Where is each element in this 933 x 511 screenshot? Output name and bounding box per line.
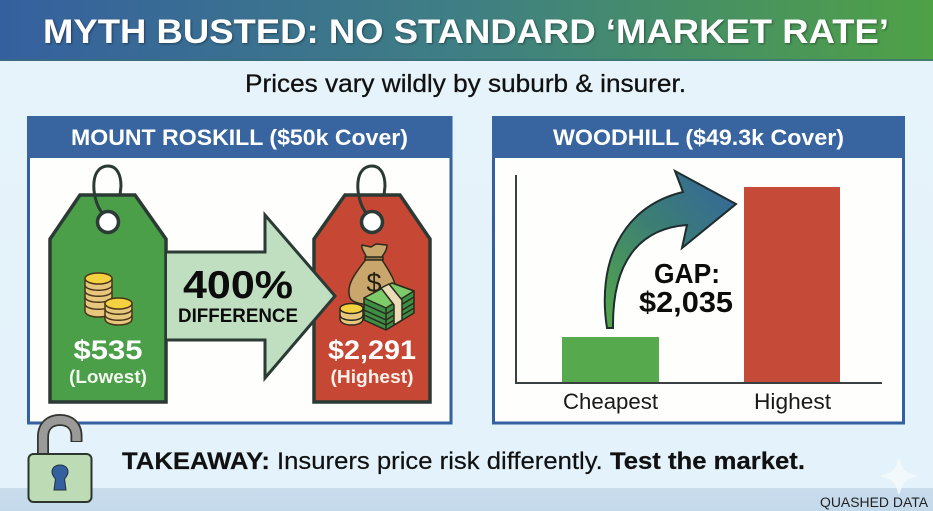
footer band	[0, 488, 933, 511]
callout: gap amount: GAP:	[654, 258, 720, 289]
price tag: highest: $2,291	[328, 335, 416, 365]
icon: money bag and cash	[340, 244, 414, 330]
icon: money bag and cash: $	[366, 268, 382, 298]
bar: highest	[744, 187, 840, 383]
callout: gap amount	[639, 258, 733, 319]
panel: Mount Roskill	[27, 116, 452, 423]
price tag: lowest: $535	[74, 335, 142, 365]
icon: open padlock	[28, 420, 92, 502]
callout: gap amount: $2,035	[639, 287, 733, 319]
panel heading: Mount Roskill: MOUNT ROSKILL ($50k Cover)	[71, 125, 408, 150]
arrow: curved gap arrow	[605, 171, 736, 328]
arrow: 400% difference: 400%	[183, 264, 293, 307]
label: highest: Highest	[754, 389, 831, 414]
panel heading: Mount Roskill	[27, 116, 452, 158]
price tag: highest: (Highest)	[330, 366, 414, 387]
price tag: lowest	[50, 166, 166, 402]
arrow: 400% difference: DIFFERENCE	[178, 305, 298, 327]
bar: cheapest	[562, 337, 659, 383]
panel: Woodhill	[492, 116, 905, 423]
panel heading: Woodhill: WOODHILL ($49.3k Cover)	[553, 125, 844, 150]
title banner	[0, 0, 933, 61]
arrow: 400% difference	[167, 215, 335, 378]
title banner: MYTH BUSTED: NO STANDARD ‘MARKET RATE’	[43, 13, 889, 51]
source credit: QUASHED DATA	[820, 495, 928, 510]
panel heading: Woodhill	[492, 116, 905, 158]
label: cheapest: Cheapest	[563, 389, 658, 414]
takeaway: TAKEAWAY: Insurers price risk differently. Test the market.	[122, 448, 805, 475]
icon: coins	[85, 273, 132, 325]
price tag: lowest: (Lowest)	[69, 366, 147, 387]
subtitle: Prices vary wildly by suburb & insurer.	[245, 70, 686, 98]
price tag: highest	[314, 166, 430, 402]
bar chart: cheapest vs highest	[516, 175, 882, 414]
icon: sparkle	[882, 460, 915, 493]
